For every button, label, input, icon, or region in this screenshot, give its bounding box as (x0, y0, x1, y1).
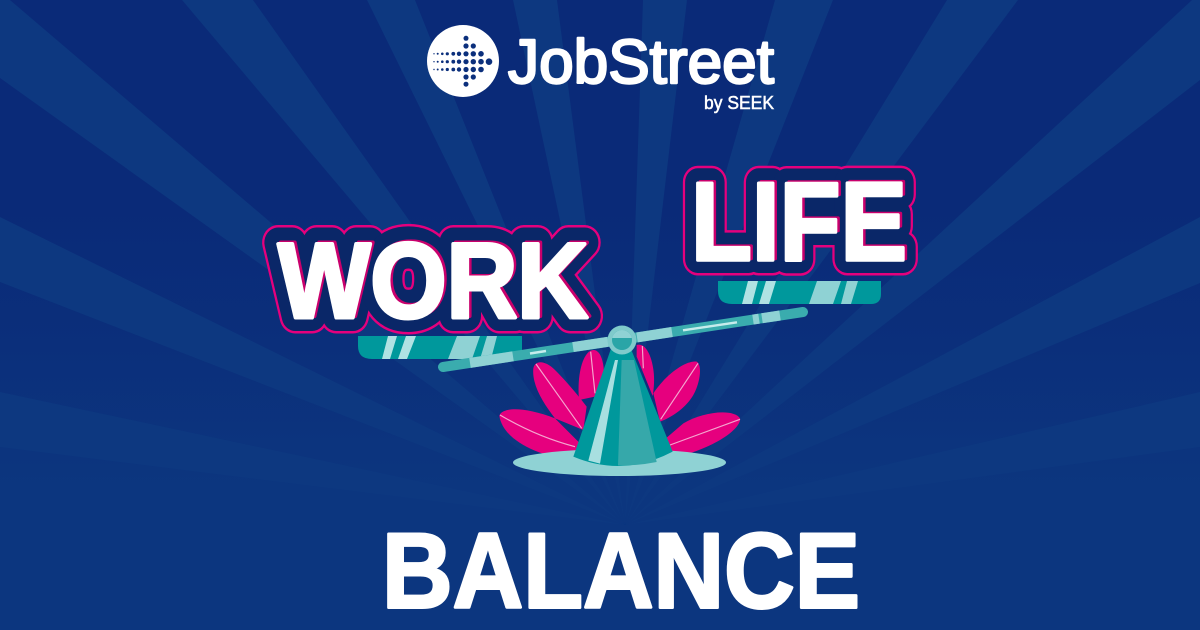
left plate (358, 336, 522, 359)
title word: WORK: WORK (278, 220, 588, 340)
logo: JobStreet by SEEK (427, 25, 774, 113)
title word: LIFE: LIFE (691, 160, 907, 284)
wordmark: JobStreet (508, 28, 774, 97)
heading: BALANCE: BALANCE (382, 510, 860, 630)
beam (443, 312, 803, 367)
cone stand (573, 347, 673, 466)
pivot (608, 326, 636, 354)
right plate (718, 281, 881, 304)
title word: WORK: WORK (278, 219, 588, 339)
illustration: balance scale (358, 281, 881, 476)
icon: circle with dotted arrow (427, 25, 499, 97)
title word: LIFE: LIFE (691, 159, 907, 283)
byline: by SEEK (704, 93, 774, 113)
title word: LIFE: LIFE (691, 159, 907, 283)
leaves (499, 345, 740, 460)
base ellipse (513, 449, 726, 476)
title word: WORK: WORK (280, 219, 590, 339)
title word: WORK: WORK (278, 219, 588, 339)
title word: LIFE: LIFE (694, 158, 910, 282)
